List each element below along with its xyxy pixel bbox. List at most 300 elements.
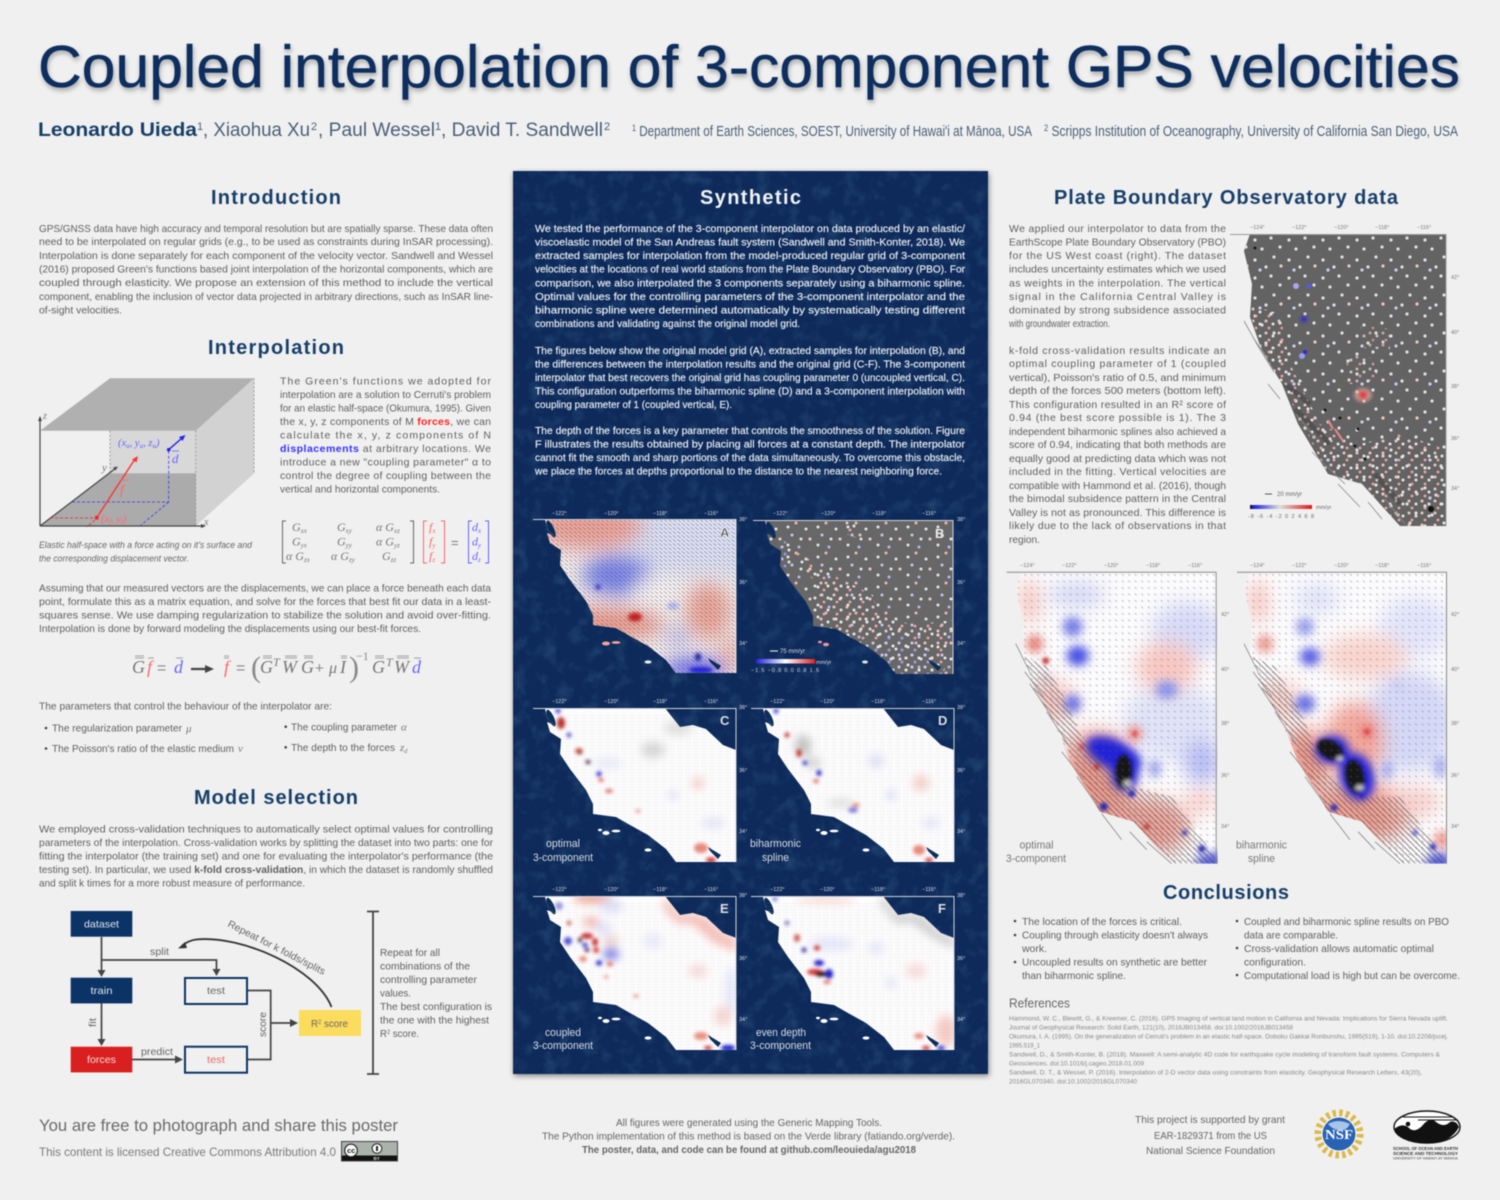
diagram: elastic half-space: (x: [118, 438, 126, 449]
label: optimal 3-component pbo: optimal: [1020, 840, 1054, 852]
text: pbo paragraph 1: as weights in the interpolation. The vertical: [1009, 278, 1226, 290]
text: measured vectors: Interpolation is done by forward modeling the displacements using our best-fit forces.: [39, 623, 421, 635]
legend: model vertical velocity: 75 mm/yr: [780, 649, 805, 655]
text: measured vectors: point, formulate this as a matrix equation, and solve for the forces that best fit our data in a least-: [39, 596, 491, 608]
equation: least squares: f: [224, 657, 232, 677]
equation: least squares: T: [386, 655, 394, 669]
text: reference list: Okumura, I. A. (1995). On the generalization of Cerruti's problem in an elastic half-space. Doboku Gakkai Ronbunshu, 1995(519), 1-10. doi:10.2208/jscej.: [1009, 1034, 1448, 1040]
panel: synthetic: [513, 171, 988, 1074]
text: pbo paragraph 1: [1008, 223, 1226, 330]
icon: creative commons badge: [342, 1142, 398, 1161]
affiliations: 1: [632, 123, 636, 133]
text: synthetic paragraph 1: velocities at the locations of real world stations from the Plate Boundary Observatory (PBO). For: [535, 264, 965, 276]
axis labels: biharmonic map: 34°: [1451, 824, 1459, 830]
heading: model selection: Model selection: [194, 787, 358, 809]
label: coupled 3-component: coupled: [545, 1027, 581, 1039]
icon: creative commons badge: cc: [347, 1146, 355, 1155]
equation: matrix: y: [477, 542, 482, 550]
map E: coupled 3-component difference: E: [720, 901, 729, 916]
node: R2 score: 2: [318, 1020, 322, 1026]
list: parameters: The Poisson's ratio of the elastic medium: [52, 743, 234, 755]
icon: NSF logo: NSF: [1325, 1128, 1353, 1143]
text: synthetic paragraph 2: The figures below show the original model grid (A), extracted samples for interpolation (B), and: [535, 345, 965, 357]
text: repeat note: the one with the highest: [380, 1014, 489, 1026]
footer: credits: [542, 1117, 955, 1156]
axis labels: optimal map: −120°: [1104, 563, 1119, 569]
axis labels: optimal map: 42°: [1221, 612, 1229, 618]
label: biharmonic spline pbo: biharmonic: [1236, 840, 1287, 852]
equation: matrix: zy: [348, 556, 356, 564]
axis labels: biharmonic map: −116°: [1417, 563, 1431, 569]
footer: funding: This project is supported by grant: [1135, 1114, 1285, 1126]
map D axis labels: [770, 699, 965, 835]
text: pbo paragraph 2: included in the fitting. Vertical velocities are: [1009, 466, 1226, 478]
map F axis labels: 34°: [957, 1017, 965, 1023]
text: reference list: Geosciences. doi:10.1016/j.cageo.2018.01.009: [1009, 1060, 1144, 1068]
pbo axis labels: −122°: [1292, 225, 1307, 231]
equation: matrix: xy: [345, 527, 353, 535]
map C: optimal 3-component difference: C: [720, 713, 730, 728]
text: pbo paragraph 2: [1009, 345, 1226, 546]
text: synthetic paragraph 2: interpolator that best recovers the original grid has coupling parameter 0 (uncoupled vertical, C).: [535, 372, 965, 384]
axis labels: biharmonic map: −124°: [1250, 563, 1265, 569]
text: repeat note: score.: [390, 1028, 419, 1040]
map B axis labels: −122°: [773, 511, 788, 517]
text: green's functions: calculate the x, y, z components of N: [280, 430, 491, 442]
map D axis labels: 34°: [957, 829, 965, 835]
text: green's functions: interpolation are a solution to Cerruti's problem: [280, 389, 491, 401]
equation: least squares: (: [251, 651, 261, 684]
text: introduction: coupled through elasticity. We propose an extension of this method to include the vertical: [39, 277, 493, 289]
caption: half-space figure: the corresponding displacement vector.: [39, 554, 189, 564]
text: green's functions: [280, 376, 492, 496]
text: green's functions: displacements at arbitrary locations. We: [280, 443, 491, 455]
equation: least squares: d: [174, 657, 184, 677]
text: green's functions: introduce a new "coupling parameter" α to: [280, 456, 491, 468]
list: parameters: α: [401, 722, 407, 734]
node: dataset: [71, 911, 132, 937]
label: biharmonic spline pbo: [1236, 840, 1287, 865]
text: pbo paragraph 1: with groundwater extraction.: [1008, 318, 1110, 330]
equation: least squares: I: [339, 657, 347, 677]
axis labels: optimal map: 34°: [1221, 824, 1229, 830]
text: green's functions: control the degree of coupling between the: [280, 470, 491, 482]
node: forces: forces: [87, 1054, 116, 1066]
map C axis labels: −120°: [604, 699, 619, 705]
equation: matrix: G: [337, 534, 346, 548]
text: synthetic paragraph 2: coupling parameter of 1 (coupled vertical, E).: [535, 399, 732, 411]
label: optimal 3-component: 3-component: [533, 852, 593, 864]
map A axis labels: 38°: [739, 517, 747, 523]
map F: even depth difference: F: [938, 901, 946, 916]
legend: model vertical velocity: [751, 649, 831, 674]
footer: credits: All figures were generated using the Generic Mapping Tools.: [616, 1117, 882, 1129]
diagram: elastic half-space: ): [155, 438, 160, 449]
label: optimal 3-component: [533, 838, 593, 864]
text: repeat note: values.: [380, 988, 411, 1000]
equation: matrix: f: [429, 549, 432, 563]
text: reference list: Hammond, W. C., Blewitt, G., & Kreemer, C. (2016). GPS Imaging of vertical land motion in California and Nevada: Implications for Sierra Nevada uplift.: [1009, 1016, 1448, 1022]
axis labels: biharmonic map: 38°: [1451, 721, 1459, 727]
map B axis labels: −118°: [872, 511, 886, 517]
axis labels: optimal map: −116°: [1188, 563, 1202, 569]
map F: even depth difference: [751, 895, 956, 1050]
equation: matrix: [282, 520, 488, 564]
node: R2 score: R: [311, 1018, 319, 1030]
text: measured vectors: squares sense. We use damping regularization to stabilize the solution and avoid over-fitting.: [39, 610, 491, 622]
map C axis labels: −122°: [552, 699, 567, 705]
equation: matrix: zz: [390, 556, 396, 564]
text: repeat note: combinations of the: [380, 960, 470, 972]
equation: matrix: α G: [286, 549, 304, 563]
text: pbo paragraph 2: depth of the forces 500 meters (bottom left).: [1009, 385, 1226, 397]
authors: [38, 120, 610, 141]
icon: SOEST logo: SCIENCE AND TECHNOLOGY: [1393, 1151, 1458, 1156]
map E axis labels: 34°: [739, 1017, 747, 1023]
map B axis labels: 34°: [957, 641, 965, 647]
equation: matrix: yx: [300, 542, 308, 550]
map F axis labels: −122°: [770, 887, 785, 893]
text: measured vectors: Assuming that our measured vectors are the displacements, we can place a force beneath each data: [39, 582, 491, 594]
map A axis labels: 34°: [739, 641, 747, 647]
authors: Leonardo Uieda: [38, 120, 197, 141]
equation: matrix: f: [429, 520, 432, 534]
map B axis labels: −120°: [821, 511, 836, 517]
heading: introduction: Introduction: [211, 187, 341, 209]
panel: conclusions: [1014, 882, 1460, 982]
map E axis labels: −118°: [653, 887, 667, 893]
text: synthetic paragraph 3: The depth of the forces is a key parameter that controls the smoothness of the solution. Figure: [535, 425, 965, 437]
legend: pbo velocity: -8 -6 -4 -2 0 2 4 6 8: [1248, 514, 1314, 520]
islands: [816, 829, 870, 852]
text: pbo paragraph 2: This configuration resulted in an R² score of: [1009, 399, 1226, 411]
diagram: elastic half-space: (x: [101, 514, 109, 525]
node: R2 score: [299, 1010, 361, 1036]
text: reference list: Sandwell, D. T., & Wessel, P. (2016). Interpolation of 2-D vector data using constraints from elasticity. Geophysical Research Letters, 43(20),: [1009, 1070, 1422, 1076]
equation: matrix: xz: [393, 527, 400, 535]
axis labels: biharmonic map: −118°: [1375, 563, 1389, 569]
text: pbo paragraph 2: k-fold cross-validation results indicate an: [1009, 345, 1226, 357]
axis labels: optimal map: [1020, 563, 1229, 830]
map A axis labels: −116°: [704, 511, 718, 517]
diagram: elastic half-space: f: [120, 483, 126, 498]
footer: share notice: [39, 1116, 398, 1161]
authors: , David T. Sandwell: [441, 120, 603, 141]
heading: references: References: [1009, 996, 1070, 1010]
heading: conclusions: Conclusions: [1163, 882, 1289, 904]
text: cross-validation: parameters of the interpolation. Cross-validation works by splitting the dataset into two parts: one for: [39, 837, 493, 849]
label: optimal 3-component pbo: 3-component: [1006, 853, 1066, 865]
text: reference list: 1995.519_1: [1009, 1042, 1040, 1050]
map B: extracted samples: [753, 520, 953, 674]
text: synthetic paragraph 1: biharmonic spline were determined automatically by systematically testing different: [535, 304, 965, 316]
list: parameters: The regularization parameter: [52, 722, 182, 734]
equation: matrix: x: [477, 527, 482, 535]
map A: original model grid: [532, 518, 738, 674]
pbo axis labels: 40°: [1451, 330, 1459, 336]
text: repeat note: Repeat for all: [380, 947, 440, 959]
equation: least squares: T: [273, 655, 281, 669]
text: reference list: Journal of Geophysical Research: Solid Earth, 121(10), 2016JB013458. doi:10.1002/2016JB013458: [1009, 1024, 1293, 1032]
legend: model vertical velocity: mm/yr: [816, 660, 831, 666]
label: split: split: [150, 947, 169, 958]
caption: half-space figure: [39, 540, 253, 564]
node: predicted test: test: [207, 1054, 225, 1066]
footer: credits: The poster, data, and code can be found at github.com/leouieda/agu2018: [582, 1144, 916, 1156]
text: synthetic paragraph 3: F illustrates the results obtained by placing all forces at a constant depth. The interpolator: [535, 438, 966, 450]
list: conclusions right: [1236, 916, 1460, 982]
map C axis labels: 34°: [739, 829, 747, 835]
list: conclusions right: Coupled and biharmonic spline results on PBO: [1244, 916, 1449, 928]
list: parameters: μ: [185, 723, 192, 735]
list: parameters: ν: [238, 743, 243, 755]
text: pbo paragraph 2: Valley is not as pronounced. This difference is: [1009, 507, 1226, 519]
pbo axis labels: 42°: [1451, 275, 1459, 281]
equation: least squares: G: [301, 657, 314, 677]
equation: matrix: G: [382, 549, 391, 563]
map C axis labels: −116°: [704, 699, 718, 705]
diagram: elastic half-space: x: [203, 517, 209, 528]
equation: least squares: G: [132, 657, 145, 677]
legend: model vertical velocity: −1.5 −0.8 0.0 0.8 1.5: [751, 668, 819, 674]
text: measured vectors: [39, 582, 491, 635]
pbo axis labels: 36°: [1451, 436, 1459, 442]
axis labels: optimal map: 38°: [1221, 721, 1229, 727]
footer: share notice: This content is licensed Creative Commons Attribution 4.0: [39, 1145, 336, 1159]
pbo axis labels: −120°: [1334, 225, 1349, 231]
icon: creative commons badge: BY: [374, 1156, 380, 1161]
map C axis labels: −118°: [653, 699, 667, 705]
axis labels: biharmonic map: 42°: [1451, 612, 1459, 618]
text: synthetic paragraph 2: This configuration outperforms the biharmonic spline (D) and a 3-component interpolation with: [535, 386, 965, 398]
text: green's functions: The Green's functions we adopted for: [280, 376, 492, 388]
equation: matrix: α G: [331, 549, 349, 563]
diagram: elastic half-space: f: [109, 518, 112, 526]
map F axis labels: −120°: [820, 887, 835, 893]
islands: [818, 641, 868, 664]
label: predict: predict: [141, 1047, 173, 1058]
text: synthetic paragraph 1: extracted samples for interpolation from the model-produced regular grid of 3-component: [535, 250, 965, 262]
diagram: elastic half-space: z: [42, 411, 47, 422]
text: pbo paragraph 2: vertical), Poisson's ratio of 0.5, and minimum: [1009, 372, 1226, 384]
legend: pbo velocity: [1248, 492, 1331, 520]
legend: pbo velocity: 20 mm/yr: [1277, 492, 1302, 498]
equation: matrix: z: [477, 556, 481, 564]
map A axis labels: −118°: [653, 511, 667, 517]
text: cross-validation: testing set). In particular, we used k-fold cross-validation, in which the dataset is randomly shuffled: [39, 864, 493, 876]
text: reference list: 2016GL070340. doi:10.1002/2016GL070340: [1009, 1078, 1137, 1086]
text: introduction: component, enabling the inclusion of vector data projected in arbitrary directions, such as InSAR line-: [39, 291, 493, 303]
text: repeat note: [380, 947, 492, 1040]
axis labels: biharmonic map: −120°: [1334, 563, 1349, 569]
node: dataset: dataset: [84, 918, 119, 930]
axis labels: optimal map: −118°: [1146, 563, 1160, 569]
equation: least squares: [132, 649, 422, 684]
text: cross-validation: [39, 824, 493, 890]
list: parameters: The depth to the forces: [291, 742, 395, 754]
node: test: test: [207, 985, 225, 997]
text: green's functions: for an elastic half-space (Okumura, 1995). Given: [280, 402, 491, 414]
equation: matrix: G: [337, 520, 346, 534]
label: coupled 3-component: 3-component: [533, 1040, 593, 1052]
equation: least squares: G: [260, 657, 273, 677]
caption: half-space figure: Elastic half-space with a force acting on it's surface and: [39, 540, 253, 551]
text: pbo paragraph 2: equally good at predicting data which was not: [1009, 453, 1226, 465]
text: pbo paragraph 2: likely due to the lack of observations in that: [1009, 520, 1226, 532]
map E axis labels: 38°: [739, 893, 747, 899]
map E axis labels: 36°: [739, 956, 747, 962]
equation: least squares: d: [412, 657, 422, 677]
map C axis labels: 38°: [739, 705, 747, 711]
label: repeat folds: Repeat for k folds/splits: [226, 919, 327, 978]
icon: SOEST logo: [1393, 1111, 1460, 1160]
label: fit: fit: [88, 1018, 99, 1027]
text: synthetic paragraph 1: viscoelastic model of the San Andreas fault system (Sandwell and Smith-Konter, 2018). We: [535, 236, 965, 248]
authors: 1: [197, 121, 203, 133]
axis labels: biharmonic map: 40°: [1451, 667, 1459, 673]
text: repeat note: R: [380, 1028, 388, 1040]
node: train: train: [90, 985, 113, 997]
list: conclusions right: Computational load is high but can be overcome.: [1244, 970, 1460, 982]
text: synthetic paragraph 3: [534, 425, 966, 478]
offshore vectors: [1244, 644, 1400, 864]
list: conclusions left: Uncoupled results on synthetic are better: [1022, 956, 1207, 968]
diagram: elastic half-space: , y: [111, 514, 121, 525]
icon: NSF logo: [1318, 1113, 1360, 1155]
diagram: elastic half-space: u: [140, 442, 144, 450]
footer: funding: National Science Foundation: [1146, 1145, 1275, 1157]
map E axis labels: −122°: [552, 887, 567, 893]
map C: optimal 3-component difference: [533, 708, 736, 862]
text: synthetic paragraph 3: cannot fit the smooth and sharp portions of the data simultaneously. To overcome this obstacle,: [535, 452, 965, 464]
footer: funding: [1135, 1114, 1285, 1157]
authors: 1: [435, 121, 441, 133]
equation: least squares: W: [394, 657, 411, 677]
equation: matrix: y: [431, 542, 436, 550]
map E axis labels: [552, 887, 747, 1023]
islands: [602, 641, 652, 664]
text: introduction: Interpolation is done separately for each component of the velocity vector. Sandwell and Wessel: [39, 250, 493, 262]
panel: model selection: [39, 787, 493, 1074]
map D: biharmonic spline difference: D: [938, 713, 947, 728]
text: pbo paragraph 2: region.: [1009, 534, 1040, 546]
text: pbo paragraph 1: EarthScope Plate Boundary Observatory (PBO): [1009, 236, 1226, 248]
text: pbo paragraph 1: includes uncertainty estimates which we used: [1009, 264, 1226, 276]
offshore vectors: [1016, 644, 1172, 864]
pbo axis labels: 38°: [1451, 384, 1459, 390]
footer: funding: EAR-1829371 from the US: [1154, 1130, 1267, 1142]
map F axis labels: −118°: [871, 887, 885, 893]
pbo axis labels: 34°: [1451, 486, 1459, 492]
equation: least squares: μ: [328, 660, 337, 677]
text: pbo paragraph 2: score of 0.94, indicating that both methods are: [1009, 439, 1226, 451]
map: pbo stations: [1230, 234, 1446, 526]
label: biharmonic spline pbo: spline: [1248, 853, 1275, 865]
text: pbo paragraph 1: signal in the California Central Valley is: [1009, 291, 1226, 303]
text: synthetic paragraph 1: comparison, we also interpolated the 3 components separately using a biharmonic spline.: [535, 278, 965, 290]
equation: least squares: +: [315, 660, 324, 677]
equation: least squares: ): [349, 651, 359, 684]
list: conclusions right: Cross-validation allows automatic optimal: [1244, 943, 1434, 955]
label: even depth 3-component: even depth: [756, 1027, 806, 1039]
text: reference list: Sandwell, D., & Smith-Konter, B. (2018). Maxwell: A semi-analytic 4D code for earthquake cycle modeling of transform fault systems. Computers &: [1009, 1052, 1440, 1058]
map A axis labels: 36°: [739, 580, 747, 586]
text: synthetic paragraph 2: [535, 345, 965, 411]
diagram: elastic half-space: d: [172, 451, 179, 466]
islands: [598, 1017, 652, 1040]
map B axis labels: 36°: [957, 580, 965, 586]
text: introduction: of-sight velocities.: [39, 304, 122, 316]
text: cross-validation: We employed cross-validation techniques to automatically select optimal values for controlling: [39, 824, 493, 836]
authors: , Paul Wessel: [318, 120, 435, 141]
equation: matrix: x: [431, 527, 436, 535]
list: conclusions right: configuration.: [1244, 956, 1306, 968]
text: synthetic paragraph 1: combinations and validating against the original model grid.: [535, 318, 800, 330]
map D axis labels: −122°: [770, 699, 785, 705]
map D axis labels: 38°: [957, 705, 965, 711]
text: cross-validation: and split k times for a more robust measure of performance.: [39, 878, 305, 890]
text: synthetic paragraph 2: the differences between the interpolation results and the original grid (C-F). The 3-component: [535, 358, 965, 370]
map B: extracted samples: B: [935, 526, 944, 541]
map A axis labels: −120°: [604, 511, 619, 517]
map E axis labels: −116°: [704, 887, 718, 893]
axis labels: optimal map: −124°: [1020, 563, 1035, 569]
equation: matrix: zx: [303, 556, 311, 564]
equation: least squares: G: [372, 657, 385, 677]
text: pbo paragraph 2: independent biharmonic splines also achieved a: [1009, 426, 1226, 438]
map E axis labels: −120°: [604, 887, 619, 893]
map D axis labels: −118°: [871, 699, 885, 705]
map D: biharmonic spline difference: [751, 708, 954, 862]
map C axis labels: [552, 699, 747, 835]
list: conclusions right: data are comparable.: [1244, 930, 1338, 942]
axis labels: optimal map: −122°: [1062, 563, 1077, 569]
panel: interpolation: [38, 337, 492, 755]
equation: matrix: d: [472, 520, 478, 534]
label: optimal 3-component pbo: [1006, 840, 1066, 865]
islands: [816, 1017, 870, 1040]
text: parameters intro: The parameters that control the behaviour of the interpolator are:: [39, 700, 332, 712]
authors: 2: [604, 121, 610, 133]
authors: 2: [311, 121, 317, 133]
equation: matrix: f: [429, 534, 432, 548]
text: pbo paragraph 2: the bimodal subsidence pattern in the Central: [1009, 493, 1226, 505]
equation: matrix: α G: [376, 534, 394, 548]
diagram: elastic half-space: , z: [143, 438, 152, 449]
text: synthetic paragraph 1: We tested the performance of the 3-component interpolator on data produced by an elastic/: [535, 223, 965, 235]
panel: introduction: [39, 187, 493, 316]
equation: matrix: z: [431, 556, 435, 564]
axis labels: optimal map: 36°: [1221, 773, 1229, 779]
list: conclusions left: work.: [1021, 943, 1047, 955]
equation: least squares: =: [236, 660, 245, 677]
panel: plate boundary observatory data: [1006, 187, 1459, 871]
map F axis labels: −116°: [922, 887, 936, 893]
map E: coupled 3-component difference: [532, 893, 737, 1051]
map A: original model grid: A: [720, 525, 730, 540]
map D axis labels: −120°: [820, 699, 835, 705]
label: even depth 3-component: [750, 1027, 811, 1052]
node: forces: [71, 1047, 132, 1072]
map B axis labels: 38°: [957, 517, 965, 523]
list: parameters: z: [400, 742, 404, 754]
map A axis labels: −122°: [552, 511, 567, 517]
equation: matrix: G: [292, 534, 301, 548]
label: coupled 3-component: [533, 1027, 593, 1052]
text: synthetic paragraph 1: Optimal values for the controlling parameters of the 3-component interpolator and the: [535, 291, 965, 303]
map: optimal 3-component PBO: [1007, 572, 1236, 871]
text: pbo paragraph 2: optimal coupling parameter of 1 (coupled: [1009, 358, 1226, 370]
